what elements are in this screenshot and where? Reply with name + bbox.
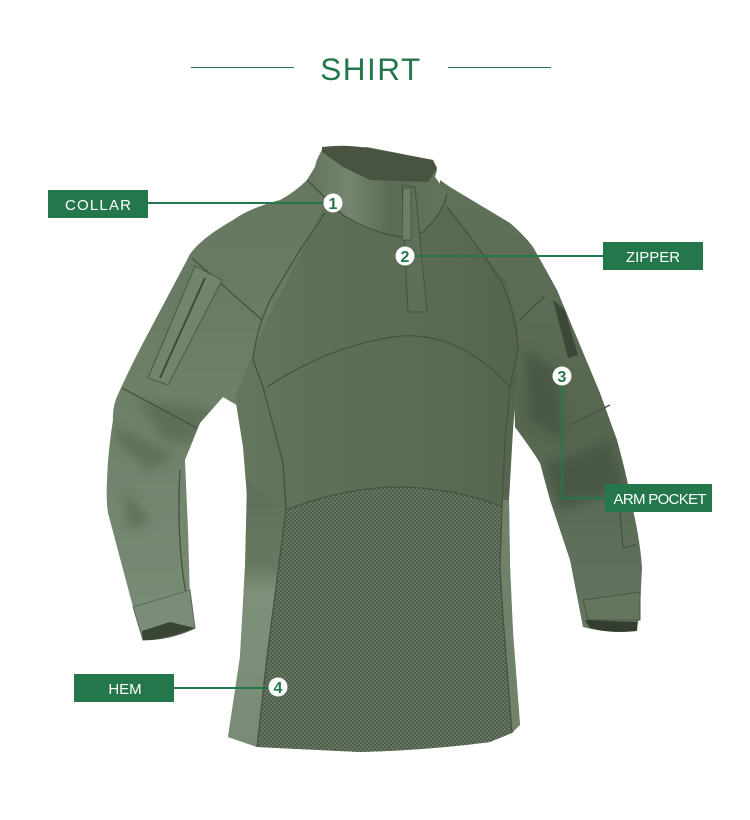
left sleeve bbox=[107, 150, 325, 640]
callout: collar bbox=[48, 190, 342, 218]
callout: zipper: 2 bbox=[401, 249, 410, 266]
left cuff opening bbox=[142, 622, 195, 640]
callout: collar: COLLAR bbox=[65, 197, 131, 214]
title: SHIRT bbox=[320, 51, 422, 87]
callout: collar: 1 bbox=[329, 196, 338, 213]
callout: arm pocket: 3 bbox=[558, 369, 567, 386]
left side panel bbox=[228, 480, 286, 747]
callout: zipper bbox=[396, 242, 703, 270]
callout: arm pocket bbox=[552, 366, 712, 512]
left forearm folds bbox=[112, 400, 215, 530]
right sleeve bbox=[440, 180, 642, 631]
left arm pocket bbox=[148, 266, 222, 385]
right sleeve folds bbox=[525, 350, 625, 510]
torso bbox=[228, 205, 520, 752]
callout: zipper: ZIPPER bbox=[626, 249, 680, 266]
right side panel bbox=[500, 500, 520, 733]
callout: hem bbox=[74, 674, 288, 702]
right cuff opening bbox=[585, 620, 637, 632]
left cuff bbox=[133, 590, 195, 640]
callout: hem: HEM bbox=[108, 681, 142, 698]
callout: hem: 4 bbox=[274, 680, 283, 697]
right arm pocket bbox=[553, 300, 578, 358]
left pocket opening bbox=[160, 278, 205, 378]
seams bbox=[122, 180, 636, 747]
zipper placket bbox=[402, 185, 427, 312]
mesh panel bbox=[257, 487, 512, 752]
zipper pull bbox=[402, 188, 411, 240]
collar inner bbox=[322, 146, 437, 182]
collar bbox=[307, 147, 447, 237]
right cuff bbox=[583, 592, 640, 620]
shirt illustration bbox=[107, 146, 642, 752]
callout: arm pocket: ARM POCKET bbox=[614, 491, 706, 508]
